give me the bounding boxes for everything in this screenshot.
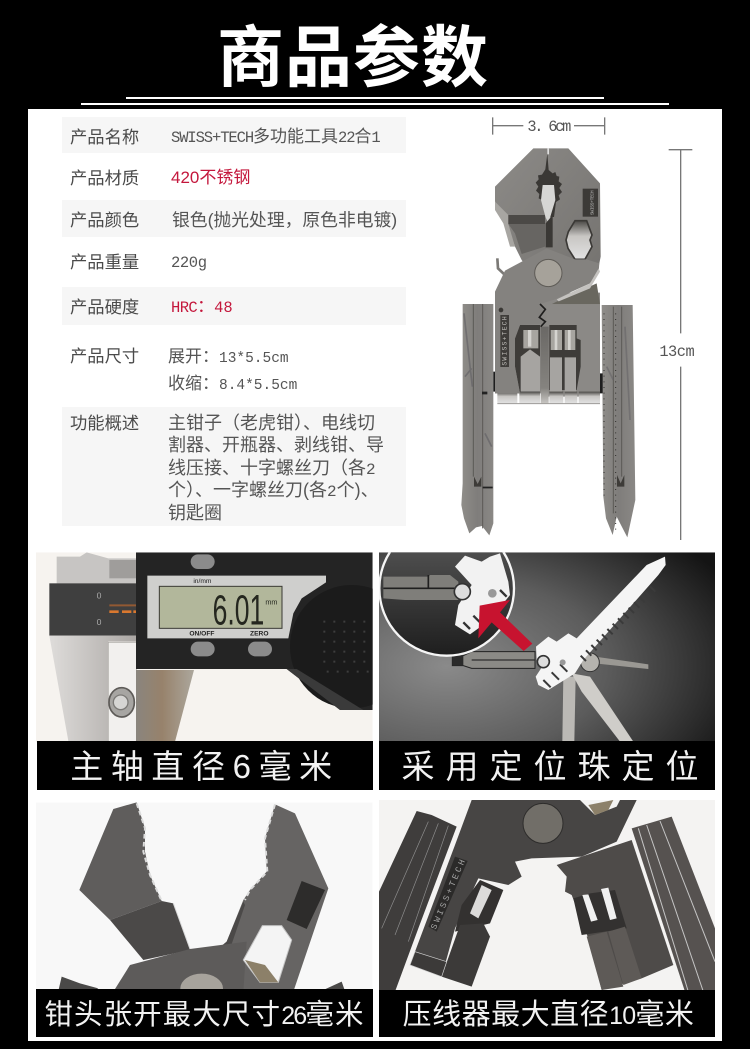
- row: function overview: [70, 413, 384, 523]
- caption: positioning ball: [379, 741, 715, 790]
- photo: crimper: [379, 800, 715, 990]
- row: weight: 220g: [171, 254, 207, 272]
- pivot bolt: [180, 974, 223, 989]
- pivot plate: [495, 248, 599, 393]
- right jaw: [222, 804, 328, 989]
- multi-tool: [461, 148, 635, 537]
- left arm tools: [461, 304, 493, 535]
- pivot bolt: [535, 259, 562, 287]
- photo: caliper main shaft: ON/OFF: [189, 631, 214, 638]
- lower body: [495, 293, 600, 393]
- photo: caliper main shaft: mm: [265, 597, 278, 606]
- caption: main shaft: 主轴直径6毫米: [70, 748, 340, 785]
- row: material: 420不锈钢: [171, 168, 250, 187]
- icon: height dimension 13cm: 13cm: [659, 343, 695, 361]
- caliper scale marks: 0: [97, 590, 102, 600]
- brand plate: [428, 857, 468, 932]
- icon: width dimension 3.6cm: [493, 117, 605, 136]
- caption: crimper: 压线器最大直径10毫米: [403, 999, 694, 1031]
- photo: caliper main shaft: [36, 552, 373, 742]
- row: dimensions: 产品尺寸: [70, 346, 139, 366]
- row: product name: [70, 127, 380, 147]
- row: weight: 产品重量: [70, 252, 139, 272]
- row: dimensions: 展开：13*5.5cm: [168, 347, 289, 367]
- multi-tool: SWISS+TECH: [589, 190, 595, 215]
- left tool stack: [379, 811, 457, 992]
- row: material: 产品材质: [70, 168, 139, 188]
- row: hardness: HRC：48: [171, 297, 233, 317]
- throat teeth: [536, 153, 562, 217]
- hook: [497, 258, 505, 275]
- product photo with dimensions: [461, 117, 695, 540]
- row: product name: 产品名称: [70, 127, 139, 147]
- red arrow: [478, 600, 532, 651]
- icon: height dimension 13cm: [659, 150, 695, 540]
- wrench hole: [566, 221, 592, 259]
- caliper scale marks: [97, 592, 136, 625]
- photo: crimper: SWISS+TECH: [429, 858, 468, 931]
- bit recess left: [515, 325, 540, 393]
- right bits: [573, 890, 627, 935]
- title: 商品参数: [217, 4, 489, 101]
- bit recess right: [549, 325, 581, 390]
- screw: [109, 688, 134, 717]
- row: weight: [70, 252, 207, 272]
- left jaw: [79, 802, 162, 920]
- bits: [523, 330, 575, 350]
- row: function overview: 主钳子（老虎钳）、电线切 割器、开瓶器、剥线钳、导 线压接、十字螺丝刀（各2 个）、一字螺丝刀(各2个)、 钥匙圈: [168, 413, 384, 523]
- right tool stack: [632, 817, 715, 992]
- multi-tool: SWISS+TECH: [502, 316, 509, 366]
- caption: jaw opening: 钳头张开最大尺寸26毫米: [44, 999, 365, 1031]
- row: colour: 银色(抛光处理，原色非电镀): [172, 210, 397, 230]
- caption: jaw opening: [36, 989, 373, 1037]
- caption: crimper: [379, 990, 715, 1037]
- caption: main shaft: [37, 741, 373, 790]
- row: product name: SWISS+TECH多功能工具22合1: [171, 127, 380, 147]
- hinge rollers: [497, 392, 600, 403]
- panel: parameter table: [62, 117, 406, 526]
- caliper body: [136, 552, 373, 710]
- brand plate: [500, 315, 509, 367]
- lower right body: [557, 840, 673, 990]
- jaw plate: [287, 881, 325, 929]
- row: material: [70, 168, 250, 188]
- display bezel: [147, 576, 326, 638]
- row: hardness: 产品硬度: [70, 297, 139, 317]
- left bits: [455, 880, 503, 932]
- photo: caliper main shaft: ZERO: [250, 631, 268, 638]
- photo: jaw opening: [58, 802, 344, 989]
- tool with ruler blade: [452, 557, 666, 742]
- row: dimensions: [70, 346, 297, 394]
- photo: caliper main shaft: in/mm: [193, 578, 212, 585]
- photo: positioning ball: [379, 552, 715, 741]
- centre strip: [541, 327, 549, 403]
- display reading: 6.01: [213, 586, 264, 634]
- row: function overview: 功能概述: [70, 413, 139, 433]
- jaw plate: [583, 189, 598, 217]
- right arm tools: [602, 305, 635, 537]
- row: dimensions: 收缩：8.4*5.5cm: [168, 374, 297, 394]
- upper body with pivot: [415, 800, 637, 962]
- upper jaw head: [495, 148, 601, 287]
- row: colour: [70, 210, 397, 230]
- wrench hole: [243, 926, 292, 982]
- zoom inset circle: [379, 552, 516, 657]
- row: hardness: [70, 297, 233, 317]
- caliper scale marks: 0: [97, 617, 102, 627]
- icon: width dimension 3.6cm: 3. 6cm: [527, 118, 571, 136]
- row: colour: 产品颜色: [70, 210, 139, 230]
- caption: positioning ball: 采用定位珠定位: [402, 748, 710, 785]
